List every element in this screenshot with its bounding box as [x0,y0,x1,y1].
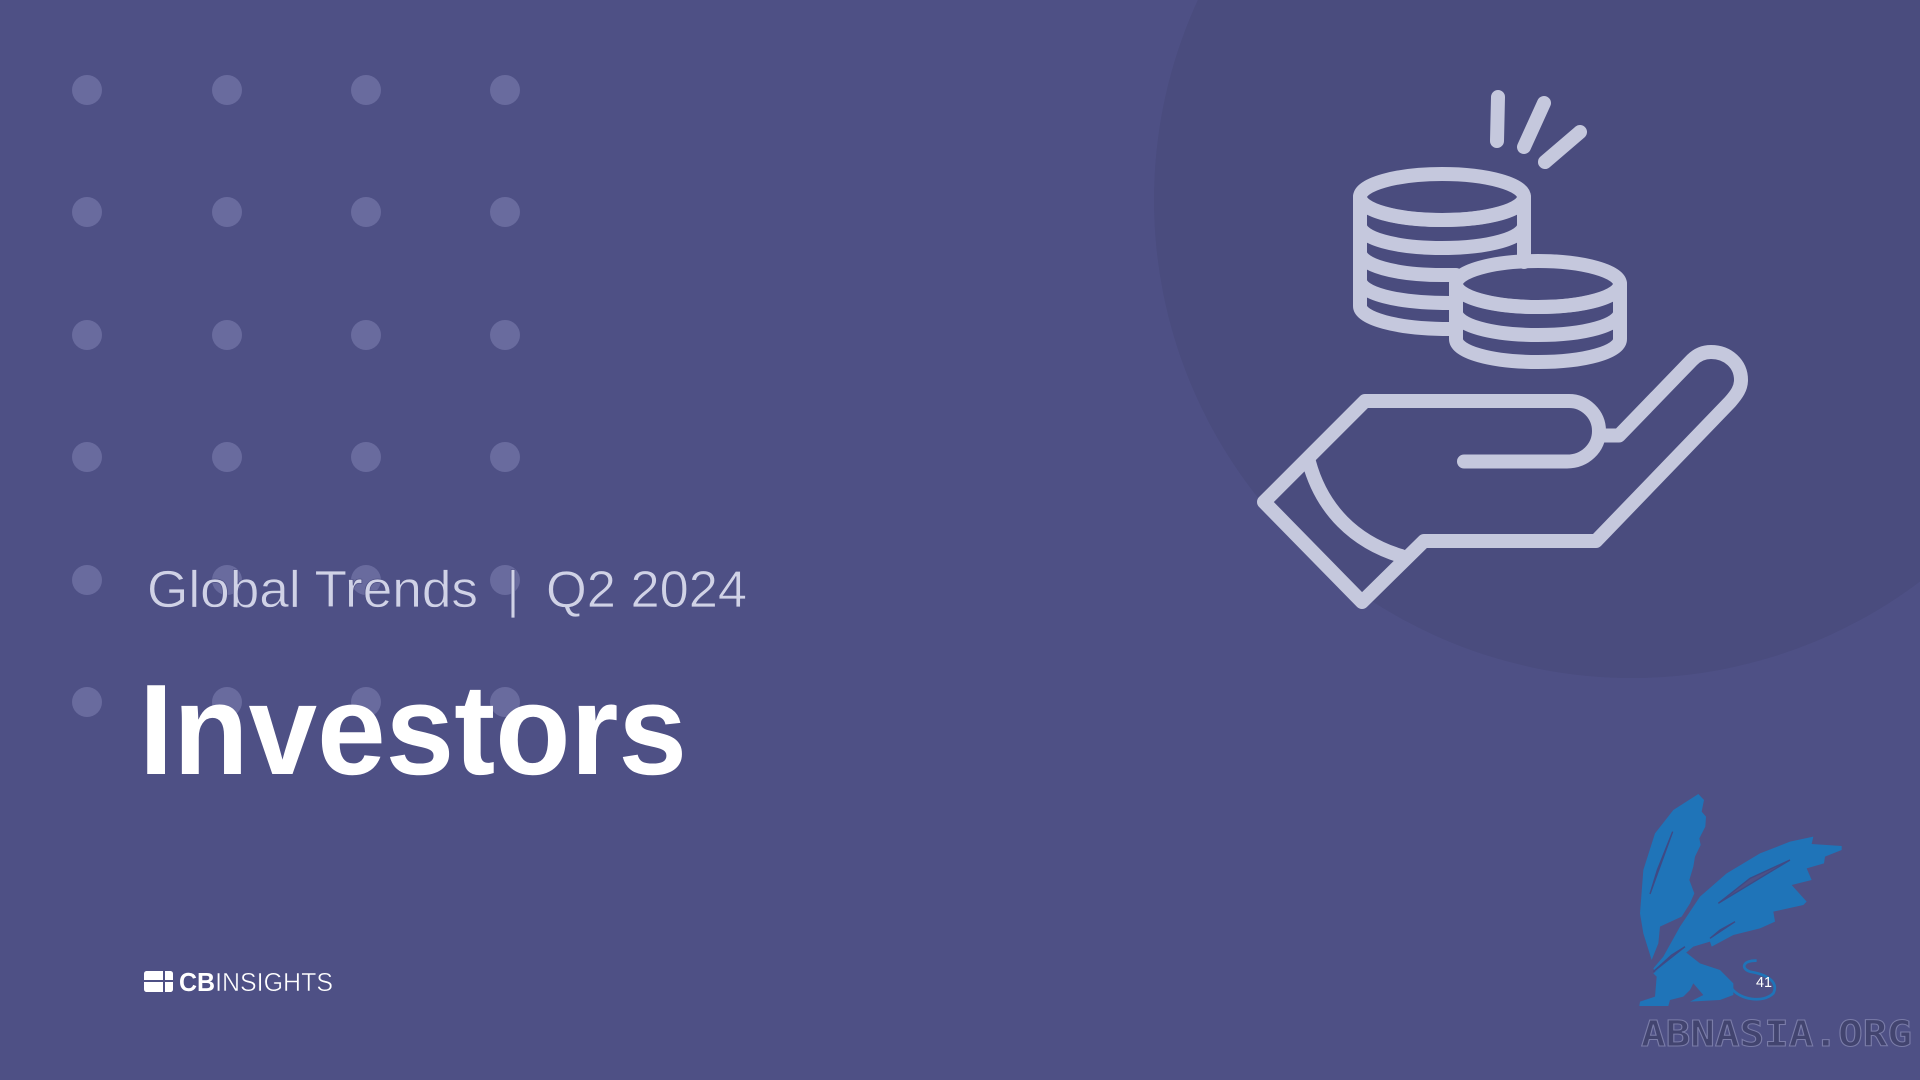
subtitle: Global Trends [147,561,478,619]
subtitle [147,561,747,619]
subtitle: | [507,561,519,619]
subtitle: Q2 2024 [546,561,747,619]
watermark text: ABNASIA.ORG [1641,1014,1912,1055]
griffin right wing [1653,837,1842,972]
title: Investors [139,658,687,802]
icon: open hand [1264,352,1741,602]
dot grid [72,75,520,717]
icon: hand holding coins [1264,97,1741,602]
logo text: CBINSIGHTS [179,967,333,997]
watermark: griffin [1639,794,1842,1006]
background circle [1154,0,1920,678]
griffin body [1639,952,1733,1006]
icon: small coin stack [1456,261,1620,362]
griffin left wing [1640,794,1706,960]
icon: large coin stack [1360,174,1524,329]
icon: sparkle rays [1497,97,1580,162]
icon: CB Insights mark [144,971,173,992]
griffin feather slits [1650,832,1790,972]
page number: 41 [1756,974,1772,991]
logo: CB Insights [144,967,333,997]
griffin tail [1732,961,1775,999]
